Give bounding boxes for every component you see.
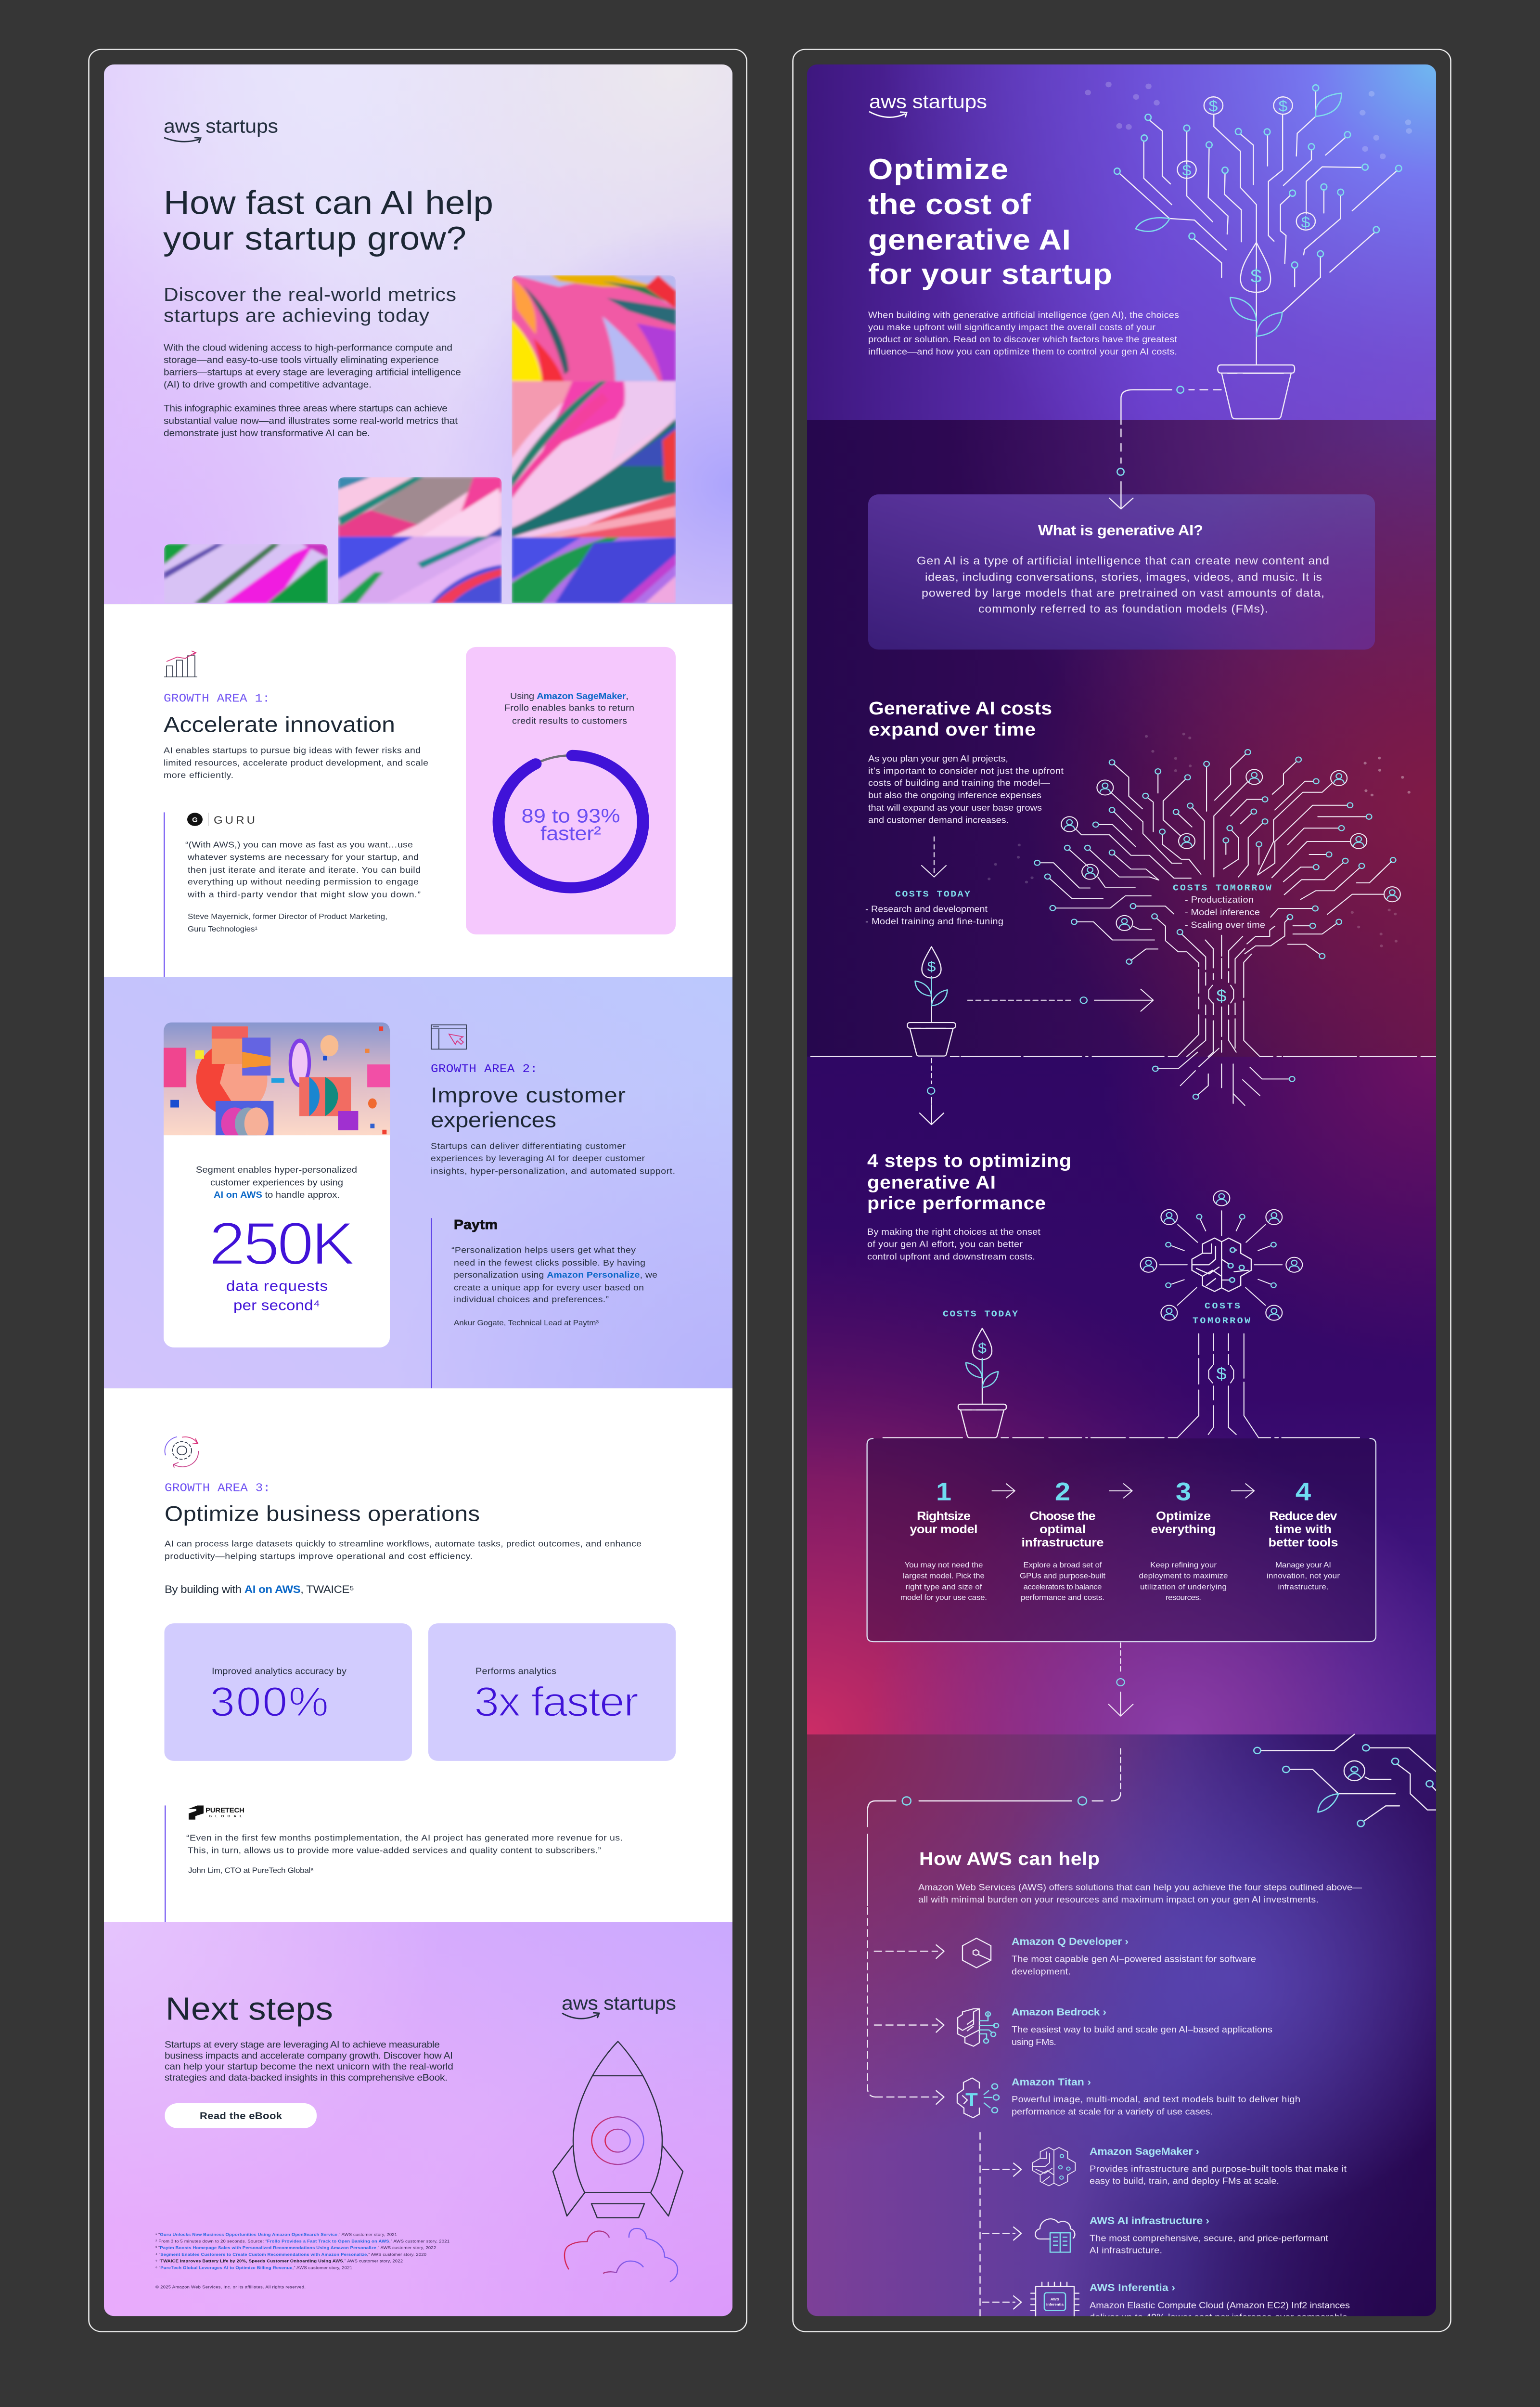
- icon: bar chart: [164, 651, 197, 677]
- heading: experiences: [431, 1107, 556, 1132]
- intro text: This infographic examines three areas where startups can achieve: [164, 403, 448, 414]
- logo: PureTech Global: [188, 1805, 244, 1820]
- quote: “Even in the first few months postimplementation, the AI project has generated more revenue for us.: [186, 1833, 623, 1843]
- logo: guru: [187, 813, 255, 826]
- panel: stat 300%: 300%: [210, 1679, 329, 1725]
- item: AWS AI infrastructure: [1035, 2215, 1329, 2255]
- body text: [431, 1141, 675, 1176]
- icon: small plant today: [908, 946, 956, 1056]
- panel: stat card: [466, 647, 676, 934]
- intro text: influence—and how you can optimize them to control your gen AI costs.: [868, 347, 1177, 357]
- step 4: better tools: [1269, 1537, 1338, 1549]
- panel: right infographic: [807, 65, 1436, 2322]
- intro text: When building with generative artificial intelligence (gen AI), the choices: [868, 311, 1179, 320]
- heading: 4 steps: generative AI: [867, 1172, 996, 1192]
- item: Amazon Q Developer: development.: [1012, 1967, 1071, 1977]
- logo: aws startups: aws startups: [164, 116, 278, 137]
- top-right circuit: [1261, 1734, 1436, 1821]
- item: Amazon Q Developer: [962, 1936, 1256, 1977]
- stat label: per second⁴: [233, 1297, 320, 1313]
- step 3: resources.: [1166, 1593, 1201, 1602]
- logo: aws startups: [164, 120, 277, 143]
- costs tomorrow label: TOMORROW: [1193, 1316, 1251, 1326]
- attribution: [188, 913, 387, 933]
- step 4: infrastructure.: [1278, 1583, 1328, 1591]
- step 1: 1: [936, 1477, 951, 1506]
- step 2: 2: [1055, 1477, 1070, 1506]
- body text: all with minimal burden on your resources and maximum impact on your gen AI investments.: [918, 1895, 1319, 1905]
- title: Optimize: [868, 153, 1008, 185]
- item: AWS Inferentia: Amazon Elastic Compute Cloud (Amazon EC2) Inf2 instances: [1090, 2301, 1350, 2311]
- step 3: [1139, 1477, 1228, 1602]
- section: what is gen AI: powered by large models that are pretrained on vast amounts of data,: [922, 587, 1324, 599]
- stat: faster²: [540, 823, 601, 845]
- quote: then just iterate and iterate and iterate. You can build: [188, 865, 421, 875]
- step 4: Reduce dev: [1270, 1510, 1337, 1523]
- section: what is gen AI: ideas, including conversations, stories, images, videos, and music. It is: [925, 571, 1322, 583]
- intro text: demonstrate just how transformative AI can be.: [164, 428, 370, 439]
- title: [163, 184, 493, 257]
- heading: Improve customer: [431, 1083, 626, 1107]
- step 2: accelerators to balance: [1024, 1583, 1102, 1591]
- body text: AI can process large datasets quickly to streamline workflows, automate tasks, predict outcomes, and enhance: [165, 1539, 642, 1549]
- body text: [918, 1883, 1362, 1905]
- item: Amazon Titan: Amazon Titan ›: [1012, 2076, 1091, 2088]
- body text: [165, 1539, 642, 1561]
- body text: Startups can deliver differentiating customer: [431, 1141, 626, 1151]
- section: next steps: [104, 1922, 732, 2316]
- footnotes: ⁵ “TWAICE Improves Battery Life by 20%, Speeds Customer Onboarding Using AWS,” AWS customer story, 2022: [155, 2259, 403, 2263]
- title: your startup grow?: [163, 220, 466, 257]
- costs today: - Model training and fine-tuning: [865, 917, 1003, 927]
- body text: experiences by leveraging AI for deeper customer: [431, 1153, 645, 1163]
- heading: [431, 1083, 626, 1132]
- quote rule: [431, 1218, 432, 1388]
- step 2: GPUs and purpose-built: [1020, 1572, 1105, 1580]
- intro text: storage—and easy-to-use tools virtually eliminating experience: [164, 355, 439, 365]
- subtitle: Discover the real-world metrics: [164, 284, 456, 305]
- step 3: deployment to maximize: [1139, 1572, 1228, 1580]
- heading: How AWS can help: [919, 1849, 1100, 1869]
- step 4: Manage your AI: [1275, 1561, 1331, 1569]
- button: Read the eBook: [200, 2111, 282, 2122]
- costs today: COSTS TODAY: [895, 889, 971, 899]
- diagram: brain and users: [867, 1191, 1376, 1716]
- footnotes: ² From 3 to 5 minutes down to 20 seconds. Source: “Frollo Provides a Fast Track to Open Banking on AWS,” AWS customer story, 2021: [155, 2239, 449, 2243]
- quote: [185, 840, 421, 899]
- connector from pot: [1117, 387, 1221, 475]
- item: Amazon Titan: performance at scale for a variety of use cases.: [1012, 2107, 1213, 2117]
- dollar signs on plant: [1182, 97, 1310, 286]
- down arrow: [920, 1105, 944, 1125]
- quote: “(With AWS,) you can move as fast as you want…use: [185, 840, 413, 850]
- footnotes: ⁴ “Segment Enables Customers to Create Custom Recommendations with Amazon Personalize,” AWS customer story, 2020: [155, 2252, 426, 2257]
- attribution: Steve Mayernick, former Director of Product Marketing,: [188, 913, 387, 921]
- footnotes: ³ “Paytm Boosts Homepage Sales with Personalized Recommendations Using Amazon Personalize,” AWS customer story, 2022: [155, 2245, 436, 2250]
- outer frame: left card: [89, 50, 747, 2331]
- section: how AWS can help connectors: [868, 1734, 1436, 2316]
- dollar signs on plant: $: [1279, 97, 1287, 115]
- body text: [867, 1228, 1041, 1262]
- icon: browser cursor: [431, 1025, 466, 1049]
- step 2: infrastructure: [1022, 1537, 1104, 1549]
- body text: AI enables startups to pursue big ideas with fewer risks and: [164, 745, 421, 755]
- icon: rocket: [553, 2042, 683, 2282]
- swirl bar chart image: [164, 275, 676, 603]
- intro text: substantial value now—and illustrates some real-world metrics that: [164, 416, 458, 426]
- lead-in text: By building with AI on AWS, TWAICE⁵: [165, 1583, 354, 1595]
- subtitle: [164, 284, 456, 326]
- quote: [186, 1833, 623, 1855]
- body text: costs of building and training the model—: [868, 778, 1051, 788]
- heading: Accelerate innovation: [164, 713, 395, 737]
- body text: can help your startup become the next unicorn with the real-world: [165, 2062, 453, 2072]
- step 3: Optimize: [1156, 1510, 1211, 1523]
- quote rule: [165, 1805, 166, 1922]
- body text: of your gen AI effort, you can better: [867, 1240, 1023, 1249]
- item: Amazon Titan: [957, 2076, 1300, 2118]
- intro text: (AI) to drive growth and competitive advantage.: [164, 380, 372, 390]
- logo: PureTech Global: GLOBAL: [209, 1814, 242, 1818]
- panel: stat card: credit results to customers: [512, 716, 627, 726]
- title: [868, 153, 1112, 290]
- body text: more efficiently.: [164, 770, 233, 780]
- tree illustration: [811, 733, 1436, 1105]
- panel: stat card: Frollo enables banks to return: [504, 703, 634, 713]
- item: Amazon Titan: Powerful image, multi-modal, and text models built to deliver high: [1012, 2095, 1300, 2105]
- heading: Next steps: [166, 1991, 333, 2027]
- dollar signs on plant: $: [1182, 162, 1191, 179]
- body text: [165, 2040, 453, 2083]
- section: growth area 3: [104, 1388, 732, 1922]
- intro text: barriers—startups at every stage are leveraging artificial intelligence: [164, 367, 461, 377]
- body text: and customer demand increases.: [868, 815, 1009, 825]
- step 3: everything: [1151, 1523, 1216, 1536]
- body text: strategies and data-backed insights in this comprehensive eBook.: [165, 2073, 448, 2083]
- step 4: time with: [1275, 1523, 1332, 1536]
- body text: it’s important to consider not just the upfront: [868, 766, 1064, 776]
- section: growth area 1: [104, 604, 732, 977]
- quote: personalization using Amazon Personalize, we: [454, 1270, 657, 1280]
- panel: stat 300%: Improved analytics accuracy by: [212, 1667, 346, 1676]
- title: How fast can AI help: [164, 184, 493, 221]
- quote: create a unique app for every user based on: [454, 1282, 644, 1292]
- title: generative AI: [868, 224, 1071, 256]
- dollar signs on plant: $: [1250, 266, 1262, 286]
- label: GROWTH AREA 3:: [165, 1482, 270, 1495]
- intro text: [868, 311, 1179, 357]
- item: Amazon SageMaker: [1033, 2146, 1347, 2186]
- intro text: you make upfront will significantly impact the overall costs of your: [868, 323, 1156, 333]
- quote: need in the fewest clicks possible. By having: [454, 1258, 645, 1268]
- step 4: innovation, not your: [1267, 1572, 1340, 1580]
- heading: 4 steps: price performance: [867, 1193, 1046, 1214]
- costs tomorrow label: COSTS: [1205, 1301, 1240, 1311]
- step 3: 3: [1176, 1477, 1191, 1506]
- item: AWS Inferentia: Inferentia: [1046, 2303, 1064, 2306]
- costs today label: COSTS TODAY: [943, 1309, 1018, 1319]
- dashed arrow: [934, 837, 935, 875]
- costs tomorrow: [1173, 883, 1272, 1005]
- footnotes: ⁶ “PureTech Global Leverages AI to Optimize Billing Revenue,” AWS customer story, 2021: [155, 2265, 352, 2270]
- section: what is gen AI: Gen AI is a type of artificial intelligence that can create new content and: [917, 555, 1329, 567]
- costs tomorrow: COSTS TOMORROW: [1173, 883, 1272, 893]
- stat label: [226, 1278, 328, 1313]
- body text: By making the right choices at the onset: [867, 1228, 1041, 1237]
- item: Amazon Q Developer: Amazon Q Developer ›: [1012, 1936, 1129, 1947]
- donut chart: [499, 755, 643, 888]
- icon: small plant today: $: [927, 958, 936, 974]
- item: Amazon Bedrock: using FMs.: [1012, 2038, 1056, 2047]
- illustration: money plant: [1085, 82, 1412, 475]
- intro text: [164, 343, 461, 439]
- ground line: [811, 1056, 1436, 1057]
- body text: that will expand as your user base grows: [868, 803, 1042, 813]
- item: AWS Inferentia: AWS Inferentia ›: [1090, 2282, 1175, 2293]
- item: Amazon Bedrock: The easiest way to build and scale gen AI–based applications: [1012, 2025, 1272, 2035]
- item: Amazon Bedrock: [958, 2006, 1272, 2047]
- item: Amazon SageMaker: easy to build, train, and deploy FMs at scale.: [1090, 2176, 1279, 2186]
- intro text: product or solution. Read on to discover which factors have the greatest: [868, 335, 1178, 345]
- heading: Optimize business operations: [165, 1501, 480, 1526]
- logo: guru: GURU: [214, 814, 255, 826]
- panel: stat 3x faster: 3x faster: [474, 1679, 639, 1725]
- costs tomorrow: - Scaling over time: [1185, 920, 1265, 930]
- dollar signs on plant: $: [1301, 214, 1310, 231]
- logo: aws startups: aws startups: [562, 1993, 676, 2014]
- item: AWS AI infrastructure: AWS AI infrastructure ›: [1090, 2215, 1209, 2226]
- logo: paytm: Paytm: [454, 1217, 498, 1232]
- quote: individual choices and preferences.”: [454, 1294, 609, 1304]
- quote: [451, 1245, 657, 1304]
- item: Amazon SageMaker: Provides infrastructure and purpose-built tools that make it: [1090, 2164, 1347, 2174]
- item: AWS Inferentia: deliver up to 40% lower cost per inference over comparable: [1090, 2313, 1348, 2322]
- item: AWS AI infrastructure: The most comprehensive, secure, and price-performant: [1090, 2234, 1329, 2243]
- step 2: performance and costs.: [1021, 1593, 1104, 1602]
- outer frame: right card: [793, 50, 1450, 2331]
- step 3: Keep refining your: [1150, 1561, 1217, 1569]
- footnotes: ¹ “Guru Unlocks New Business Opportunities Using Amazon OpenSearch Service,” AWS customer story, 2021: [155, 2232, 397, 2237]
- panel: stat card: Using Amazon SageMaker,: [510, 692, 629, 701]
- item: Amazon Titan: T: [965, 2090, 978, 2110]
- panel: stat card: customer experiences by using: [210, 1178, 343, 1188]
- body text: limited resources, accelerate product development, and scale: [164, 758, 428, 767]
- step 3: utilization of underlying: [1140, 1583, 1227, 1591]
- button: [165, 2103, 317, 2128]
- attribution: John Lim, CTO at PureTech Global⁶: [188, 1866, 314, 1875]
- image: abstract collage: [164, 1022, 390, 1140]
- icon: plant today: $: [978, 1340, 987, 1356]
- body text: As you plan your gen AI projects,: [868, 754, 1008, 764]
- panel: stat card: Segment enables hyper-personalized: [196, 1165, 357, 1175]
- step 1: largest model. Pick the: [903, 1572, 985, 1580]
- costs today: - Research and development: [865, 905, 988, 914]
- costs tomorrow: $: [1216, 986, 1227, 1005]
- icon: gear cycle: [165, 1437, 198, 1468]
- step 2: Choose the: [1030, 1510, 1095, 1523]
- step box: [867, 1438, 1376, 1642]
- panel: backgrounds: [807, 65, 1436, 2316]
- logo: aws startups: aws startups: [869, 91, 987, 112]
- panel: left infographic: [104, 65, 732, 2316]
- logo: PureTech Global: PURETECH: [205, 1807, 244, 1814]
- step 1: [900, 1477, 987, 1602]
- heading: 4 steps: [867, 1151, 1071, 1214]
- footnotes: [155, 2232, 449, 2270]
- stat: 89 to 93%: [522, 805, 620, 827]
- costs tomorrow label: [1193, 1301, 1251, 1326]
- panel: stat card: [164, 1022, 390, 1347]
- dollar signs on plant: $: [1209, 97, 1218, 115]
- body text: but also the ongoing inference expenses: [868, 791, 1041, 801]
- body text: insights, hyper-personalization, and automated support.: [431, 1166, 675, 1176]
- copyright: © 2025 Amazon Web Services, Inc. or its affiliates. All rights reserved.: [155, 2285, 306, 2289]
- step 1: Rightsize: [917, 1510, 971, 1523]
- body text: Amazon Web Services (AWS) offers solutions that can help you achieve the four steps outlined above—: [918, 1883, 1362, 1892]
- costs today: [865, 889, 1003, 927]
- section: growth area 2: [104, 977, 732, 1388]
- quote: This, in turn, allows us to provide more value-added services and quality content to subscribers.”: [188, 1845, 601, 1855]
- label: GROWTH AREA 1:: [164, 692, 270, 705]
- section: what is gen AI: What is generative AI?: [1038, 522, 1203, 539]
- section: costs expand heading: Generative AI costs: [869, 699, 1052, 719]
- step 4: [1267, 1477, 1340, 1591]
- panel: stat 3x faster: Performs analytics: [475, 1667, 556, 1676]
- panel: hero background: [104, 65, 732, 604]
- step 1: model for your use case.: [900, 1593, 987, 1602]
- section: what is gen AI: [868, 494, 1375, 649]
- quote: whatever systems are necessary for your startup, and: [187, 852, 419, 862]
- arrow into card: [1109, 481, 1133, 509]
- step 4: 4: [1296, 1477, 1311, 1506]
- step 1: your model: [910, 1523, 978, 1536]
- quote rule: [164, 812, 165, 977]
- section: costs expand heading: [869, 699, 1052, 740]
- body text: [868, 754, 1064, 825]
- title: the cost of: [868, 189, 1031, 221]
- quote: everything up without needing permission to engage: [188, 877, 419, 886]
- step 2: optimal: [1040, 1523, 1086, 1536]
- panel: right infographic: $: [1216, 1364, 1227, 1383]
- section: what is gen AI: commonly referred to as foundation models (FMs).: [978, 603, 1268, 615]
- item: Amazon Bedrock: Amazon Bedrock ›: [1012, 2006, 1106, 2018]
- step 1: right type and size of: [906, 1583, 982, 1591]
- item: AWS Inferentia: [1031, 2282, 1350, 2322]
- panel: stat card: AI on AWS to handle approx.: [214, 1191, 340, 1200]
- costs tomorrow: - Model inference: [1185, 908, 1260, 918]
- panel: stat 3x faster: [428, 1623, 676, 1761]
- item: Amazon Q Developer: The most capable gen AI–powered assistant for software: [1012, 1954, 1256, 1964]
- title: for your startup: [868, 258, 1112, 290]
- intro text: With the cloud widening access to high-performance compute and: [164, 343, 452, 353]
- body text: Startups at every stage are leveraging AI to achieve measurable: [165, 2040, 440, 2050]
- step 2: [1020, 1477, 1105, 1602]
- step 1: You may not need the: [905, 1561, 983, 1569]
- body text: productivity—helping startups improve operational and cost efficiency.: [165, 1551, 473, 1561]
- item: AWS AI infrastructure: AI infrastructure.: [1090, 2246, 1162, 2255]
- icon: plant today: [958, 1328, 1006, 1437]
- item: AWS Inferentia: AWS: [1051, 2297, 1059, 2301]
- stat: [522, 805, 620, 845]
- section: costs expand heading: expand over time: [869, 720, 1036, 740]
- step 2: Explore a broad set of: [1024, 1561, 1102, 1569]
- stat: 250K: 250K: [209, 1210, 355, 1277]
- stat label: data requests: [226, 1278, 328, 1294]
- quote: with a third-party vendor that might slow you down.”: [187, 890, 421, 899]
- quote: “Personalization helps users get what they: [451, 1245, 636, 1255]
- heading: 4 steps: 4 steps to optimizing: [867, 1151, 1071, 1171]
- item: Amazon SageMaker: Amazon SageMaker ›: [1090, 2146, 1199, 2157]
- attribution: Guru Technologies¹: [188, 925, 258, 933]
- body text: control upfront and downstream costs.: [867, 1252, 1035, 1262]
- costs tomorrow: - Productization: [1185, 895, 1254, 905]
- body text: business impacts and accelerate company growth. Discover how AI: [165, 2051, 453, 2061]
- logo: guru: G: [192, 816, 198, 824]
- body text: [164, 745, 428, 780]
- subtitle: startups are achieving today: [164, 305, 430, 326]
- panel: stat 300%: [165, 1623, 412, 1761]
- attribution: Ankur Gogate, Technical Lead at Paytm³: [454, 1319, 599, 1327]
- label: GROWTH AREA 2:: [431, 1063, 538, 1076]
